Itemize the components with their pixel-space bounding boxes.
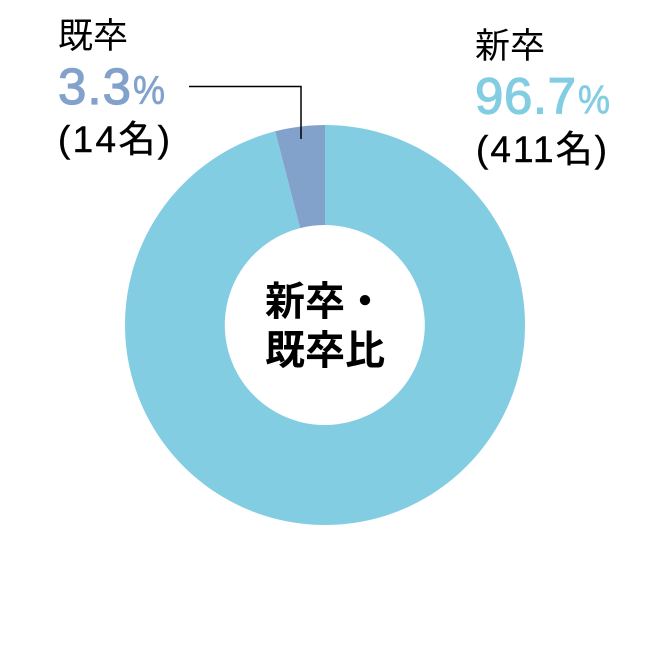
donut chart — [125, 125, 525, 525]
label: experienced: 3.3 — [58, 58, 131, 115]
segment: experienced 3.3% — [275, 125, 325, 228]
label: experienced: 既卒 — [58, 17, 128, 56]
center label: 既卒比 — [265, 329, 385, 373]
label: experienced: % — [133, 69, 165, 113]
label: new graduates: (411名) — [476, 129, 607, 170]
segment: new graduates 96.7% — [125, 125, 525, 525]
label: new graduates: 新卒 — [475, 27, 545, 66]
label: experienced: (14名) — [58, 119, 170, 160]
leader line — [189, 86, 301, 139]
center label — [265, 280, 385, 373]
label: new graduates: 96.7 — [475, 68, 576, 124]
label: new graduates — [475, 27, 610, 170]
center label: 新卒・ — [265, 280, 385, 324]
label: experienced — [58, 17, 170, 160]
label: new graduates: % — [578, 78, 610, 122]
